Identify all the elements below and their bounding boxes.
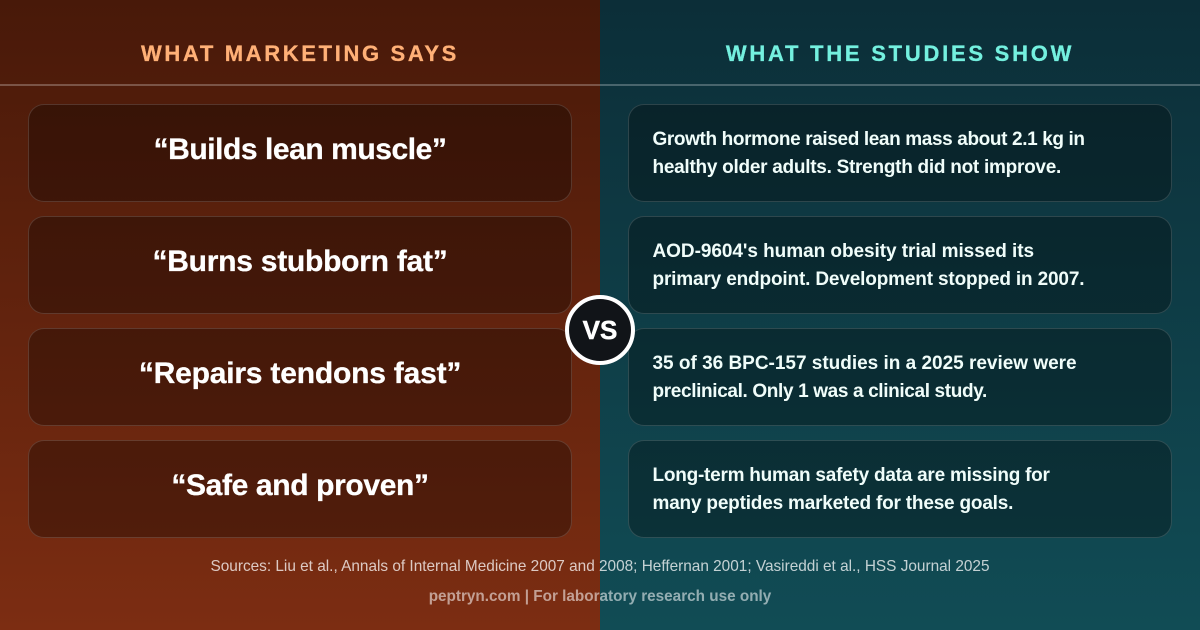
- claim card: burns stubborn fat: [28, 216, 572, 314]
- finding card: AOD-9604: primary endpoint. Development stopped in 2007.: [652, 269, 1084, 290]
- VS badge: [565, 295, 635, 365]
- finding card: safety data: [628, 440, 1172, 538]
- finding card: safety data: Long-term human safety data are missing for: [652, 465, 1050, 486]
- sources line: Sources: Liu et al., Annals of Internal Medicine 2007 and 2008; Heffernan 2001; Vasireddi et al., HSS Journal 2025: [210, 558, 990, 575]
- claim card: repairs tendons fast: “Repairs tendons fast”: [139, 357, 461, 390]
- panel: study findings: [600, 0, 1200, 630]
- finding card: BPC-157: 35 of 36 BPC-157 studies in a 2025 review were: [652, 353, 1077, 374]
- claim card: repairs tendons fast: [28, 328, 572, 426]
- finding card: AOD-9604: AOD-9604's human obesity trial missed its: [652, 241, 1034, 262]
- heading: what marketing says: [0, 0, 600, 86]
- VS badge: VS: [583, 315, 617, 345]
- finding card: BPC-157: [628, 328, 1172, 426]
- footer: site and disclaimer: peptryn.com | For laboratory research use only: [429, 588, 771, 605]
- finding card: growth hormone: healthy older adults. Strength did not improve.: [652, 157, 1061, 178]
- finding card: growth hormone: [628, 104, 1172, 202]
- claim card: safe and proven: “Safe and proven”: [171, 469, 429, 502]
- finding card: safety data: many peptides marketed for these goals.: [652, 493, 1013, 514]
- finding card: AOD-9604: [628, 216, 1172, 314]
- claim card: builds lean muscle: [28, 104, 572, 202]
- finding card: BPC-157: preclinical. Only 1 was a clinical study.: [652, 381, 987, 402]
- claim card: builds lean muscle: “Builds lean muscle”: [154, 133, 446, 166]
- heading: what the studies show: WHAT THE STUDIES SHOW: [726, 41, 1074, 66]
- heading: what the studies show: [600, 0, 1200, 86]
- panel: marketing claims: [0, 0, 600, 630]
- finding card: growth hormone: Growth hormone raised lean mass about 2.1 kg in: [652, 129, 1085, 150]
- claim card: safe and proven: [28, 440, 572, 538]
- claim card: burns stubborn fat: “Burns stubborn fat”: [152, 245, 448, 278]
- heading: what marketing says: WHAT MARKETING SAYS: [141, 41, 459, 66]
